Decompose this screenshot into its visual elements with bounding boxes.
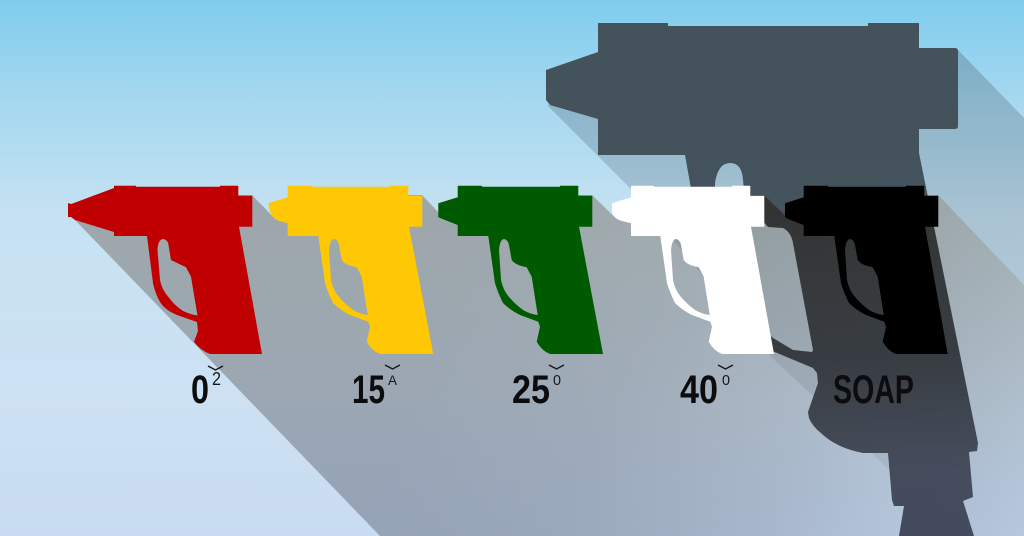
label: 0 degree: 0 <box>191 368 209 412</box>
warm grey tint on the upper shadow <box>75 195 1024 536</box>
label: 40 degree: 0 <box>722 372 730 389</box>
label: 0 degree: 2 <box>212 369 221 389</box>
icon: large dark gun silhouette <box>546 23 978 536</box>
label: 15 degree: A <box>388 372 398 388</box>
label: 0 degree <box>191 366 223 412</box>
long shadow of large gun <box>547 50 1024 536</box>
label: 40 degree: 40 <box>680 368 718 412</box>
icon: yellow 15 degree nozzle gun <box>268 186 433 354</box>
icon: white 40 degree nozzle gun <box>612 186 774 354</box>
label: 25 degree: 25 <box>512 368 550 412</box>
icon: red 0 degree nozzle gun <box>68 186 262 354</box>
label: 15 degree: 15 <box>352 368 385 412</box>
icon: green 25 degree nozzle gun <box>438 186 603 354</box>
label: SOAP: SOAP <box>833 368 914 412</box>
label: 25 degree: 0 <box>553 372 561 389</box>
long merged shadow of the five small guns <box>75 195 1024 536</box>
icon: black soap nozzle gun <box>785 186 948 354</box>
darker shadow cast on the large gun <box>750 195 976 435</box>
